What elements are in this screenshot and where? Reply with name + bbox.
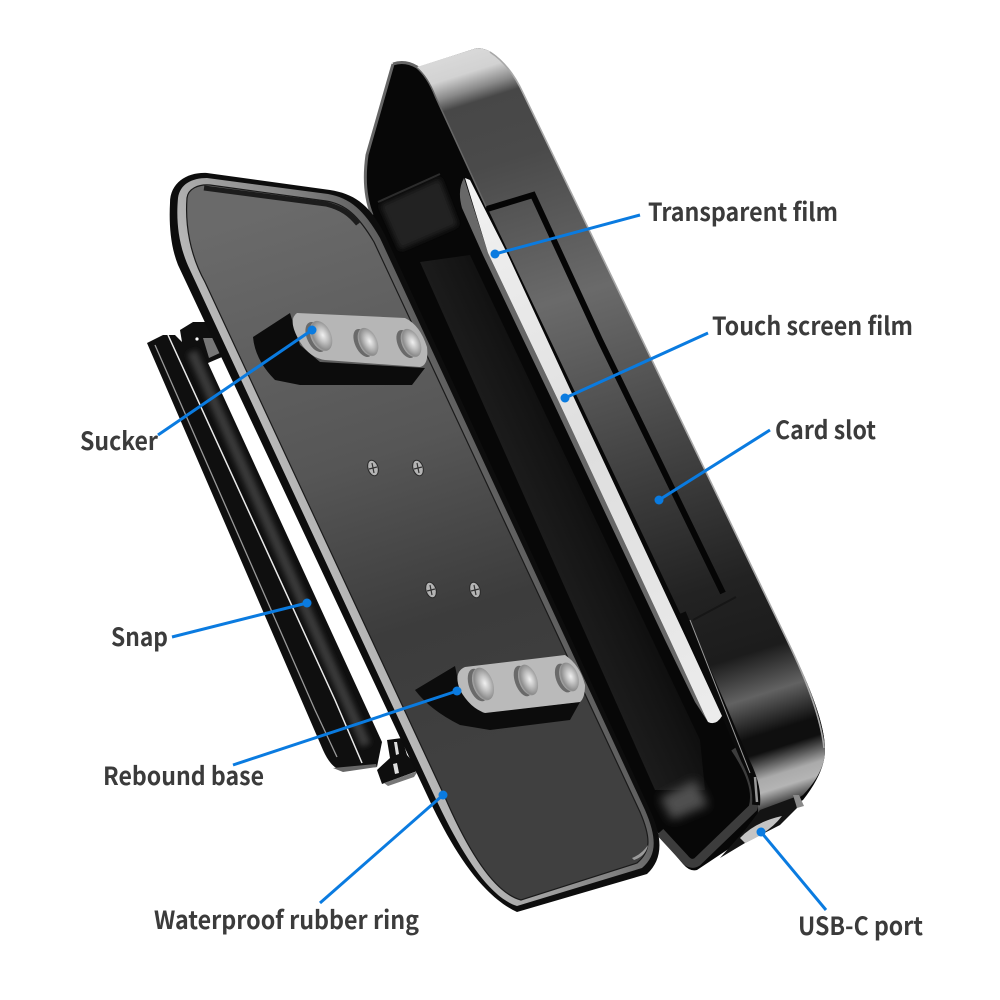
callout: Card slot	[654, 411, 876, 504]
outer shell face	[417, 48, 825, 825]
transparent and touch screen film	[465, 178, 722, 723]
lower inner rim	[682, 613, 756, 805]
film side shading	[460, 178, 708, 722]
callout: Sucker	[80, 326, 316, 458]
callout: Waterproof rubber ring: Waterproof rubber ring	[154, 901, 419, 937]
callout: Rebound base	[103, 686, 462, 793]
front plate	[170, 173, 659, 912]
callout: Transparent film	[490, 193, 838, 258]
black outer edge	[170, 173, 659, 912]
slot end line	[693, 597, 736, 620]
shell outer edge highlight	[490, 52, 824, 748]
back frame of the case	[364, 48, 825, 870]
lower hook	[377, 738, 420, 784]
callout: Sucker: Sucker	[80, 422, 158, 458]
callout: USB-C port	[756, 828, 923, 943]
snap bar	[147, 322, 420, 786]
callout: Touch screen film	[560, 307, 913, 402]
USB-C port	[720, 795, 804, 858]
lower sucker assembly	[415, 655, 585, 730]
callout: Touch screen film: Touch screen film	[712, 307, 913, 343]
corner glint	[632, 845, 648, 860]
callout: Transparent film: Transparent film	[648, 193, 838, 229]
callout: Rebound base: Rebound base	[103, 757, 264, 793]
frame bottom rim	[660, 748, 755, 863]
upper hook	[203, 338, 222, 358]
callout: Snap: Snap	[111, 618, 168, 654]
plate face	[187, 185, 648, 900]
interior back wall shading	[380, 178, 458, 250]
frame top-left rim	[365, 64, 393, 215]
screws	[366, 459, 482, 599]
top groove	[204, 188, 358, 224]
callout: USB-C port: USB-C port	[798, 907, 923, 943]
callout: Card slot: Card slot	[775, 411, 876, 447]
card slot recess	[487, 195, 723, 593]
waterproof rubber ring	[177, 178, 654, 906]
callout: Waterproof rubber ring	[154, 790, 448, 937]
callout: Snap	[111, 598, 312, 654]
frame interior	[364, 48, 825, 870]
upper sucker assembly	[253, 313, 427, 385]
